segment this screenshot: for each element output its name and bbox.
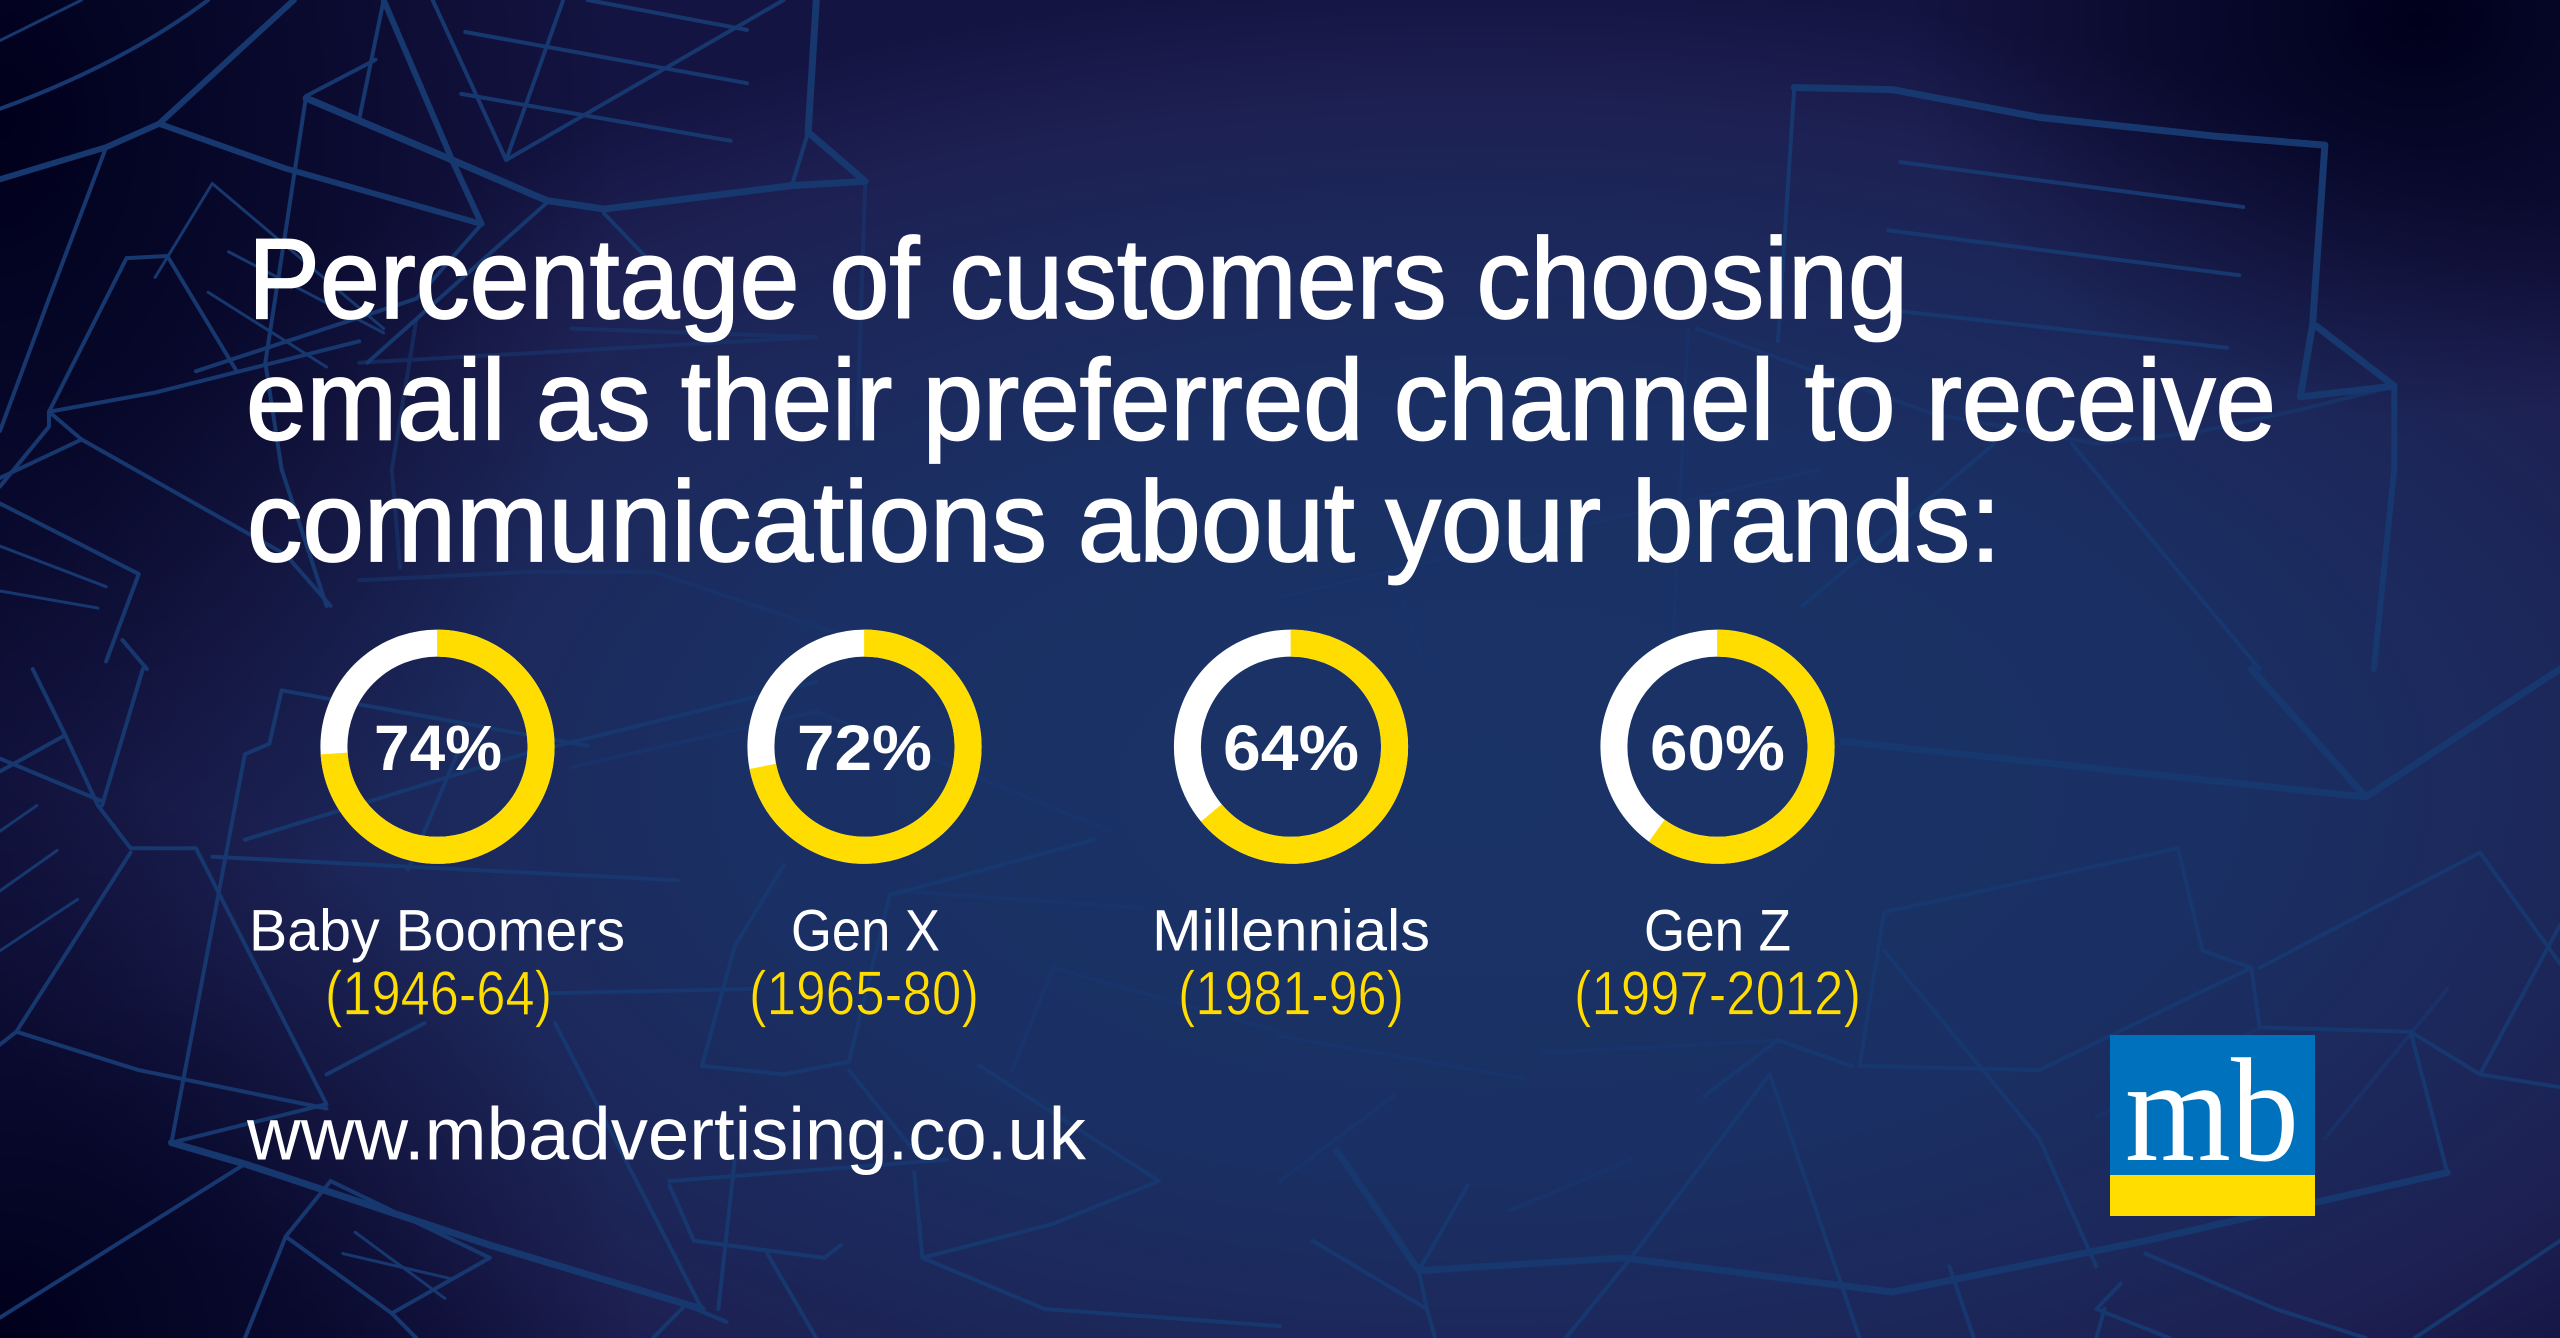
label: Baby Boomers xyxy=(249,898,625,1028)
donut: Gen Z 60% xyxy=(1614,643,1821,850)
donut: Gen X 72%: 72% xyxy=(797,712,932,784)
donut: Baby Boomers 74%: 74% xyxy=(374,712,502,784)
label: Gen Z: (1997-2012) xyxy=(1574,960,1861,1028)
label: Millennials: Millennials xyxy=(1152,898,1430,964)
donut: Baby Boomers 74% xyxy=(334,643,541,850)
title: Percentage of customers choosing xyxy=(248,216,1908,343)
label: Gen X xyxy=(749,898,979,1028)
label: Baby Boomers: Baby Boomers xyxy=(249,898,625,964)
title: communications about your brands: xyxy=(247,459,2001,586)
donut: Millennials 64%: 64% xyxy=(1223,712,1359,784)
website url: www.mbadvertising.co.uk xyxy=(246,1092,1087,1176)
label: Millennials: (1981-96) xyxy=(1178,960,1404,1028)
title xyxy=(246,216,2276,586)
label: Gen X: (1965-80) xyxy=(749,960,979,1028)
label: Gen Z xyxy=(1574,898,1861,1028)
title: email as their preferred channel to receive xyxy=(246,338,2276,464)
donut: Millennials 64% xyxy=(1187,643,1395,850)
logo: mb: mb xyxy=(2125,1029,2299,1193)
label: Baby Boomers: (1946-64) xyxy=(325,960,552,1028)
label: Gen X: Gen X xyxy=(791,898,940,964)
donut: Gen Z 60%: 60% xyxy=(1650,712,1785,784)
donut: Gen X 72% xyxy=(761,643,968,850)
label: Gen Z: Gen Z xyxy=(1644,898,1791,964)
label: Millennials xyxy=(1152,898,1430,1028)
